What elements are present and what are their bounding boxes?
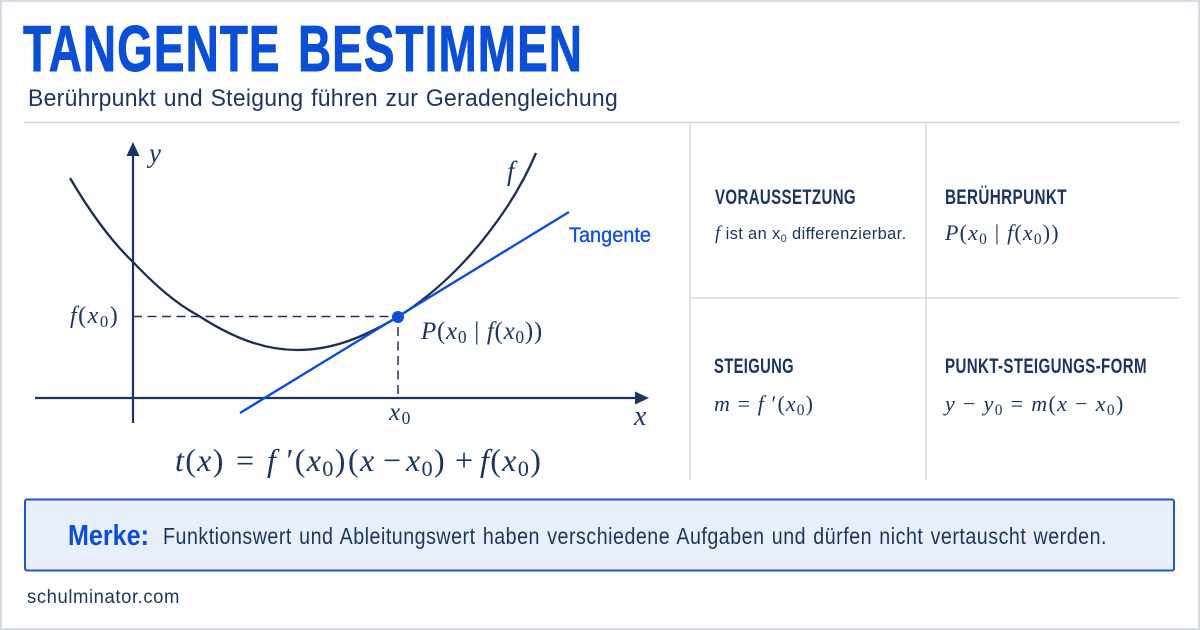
- label x0: 0: [402, 408, 412, 428]
- heading: BERÜHRPUNKT: [945, 186, 1067, 209]
- tangent equation: ): [434, 442, 446, 478]
- tangent equation: 0: [518, 456, 530, 481]
- formula: )): [1043, 220, 1060, 245]
- label point P: f(x: [487, 318, 515, 345]
- callout box: [25, 500, 1174, 570]
- panel: Steigung: [714, 355, 814, 419]
- tangent equation: +: [455, 442, 474, 478]
- tangent equation: ): [335, 442, 347, 478]
- callout: Merke: [25, 500, 1174, 570]
- formula: 0: [995, 402, 1004, 419]
- x axis: [35, 392, 649, 404]
- heading: VORAUSSETZUNG: [715, 186, 856, 209]
- label point P: 0: [515, 327, 525, 347]
- tangent equation: f: [267, 442, 280, 478]
- panel: Punkt-Steigungs-Form: [943, 355, 1147, 419]
- tangent equation: ′(x: [286, 442, 322, 478]
- text: differenzierbar.: [787, 225, 907, 243]
- label x0: x: [388, 399, 402, 426]
- formula: 0: [979, 231, 988, 248]
- tangent line: [240, 212, 569, 413]
- panel: Berührpunkt: [944, 186, 1067, 248]
- formula: ): [1116, 391, 1125, 416]
- label f(x0): 0: [100, 312, 110, 331]
- label point P: )): [525, 318, 543, 345]
- label point P: 0: [458, 327, 467, 347]
- tangent equation: f: [480, 442, 493, 478]
- text: f ist an x: [715, 223, 781, 244]
- formula: f(x: [1007, 220, 1034, 245]
- label point P: P(x: [421, 318, 458, 345]
- tangent equation: x: [359, 442, 375, 478]
- label f(x0): f(x: [70, 303, 100, 329]
- formula: 0: [1034, 231, 1043, 248]
- tangent equation: (x: [490, 442, 518, 478]
- formula: P(x: [945, 220, 979, 245]
- tangent equation: =: [236, 442, 255, 478]
- footer: schulminator.com: [27, 587, 180, 608]
- formula: |: [988, 220, 1007, 245]
- panel: Voraussetzung: [715, 186, 907, 245]
- heading: STEIGUNG: [714, 355, 794, 378]
- label Tangente: Tangente: [569, 224, 651, 247]
- formula: =: [1004, 391, 1031, 416]
- callout label: Merke:: [68, 520, 149, 552]
- tangent equation: (: [348, 442, 360, 478]
- formula: 0: [797, 402, 806, 419]
- tangent equation: ): [530, 442, 542, 478]
- formula: ): [806, 391, 814, 416]
- label y: y: [146, 138, 161, 168]
- y axis: [126, 142, 140, 423]
- text: 0: [781, 233, 787, 245]
- tangent equation: t(x): [175, 442, 225, 478]
- label f: f: [507, 156, 518, 186]
- subtitle: Berührpunkt und Steigung führen zur Geradengleichung: [28, 85, 618, 112]
- title: TANGENTE BESTIMMEN: [23, 12, 583, 85]
- tangent equation: −: [383, 442, 402, 478]
- formula: m(x − x: [1031, 391, 1107, 416]
- tangent equation: 0: [422, 456, 434, 481]
- label f(x0): ): [110, 303, 119, 329]
- label point P: |: [467, 318, 487, 345]
- tangent equation: x: [405, 442, 422, 478]
- formula: y − y: [945, 391, 995, 416]
- point P: [392, 311, 404, 323]
- formula: 0: [1107, 402, 1116, 419]
- curve f: [70, 153, 536, 350]
- label x: x: [633, 401, 647, 432]
- chart: function with tangent: [35, 138, 651, 432]
- tangent equation: 0: [322, 456, 335, 481]
- formula: m = f ′(x: [714, 391, 797, 416]
- dashed guide lines: [133, 316, 398, 398]
